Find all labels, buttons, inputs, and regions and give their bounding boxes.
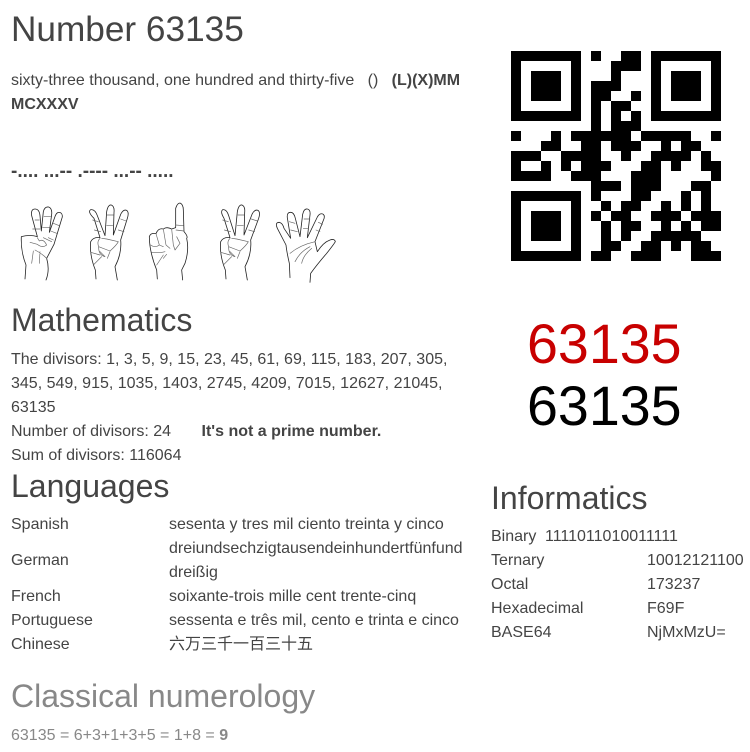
languages table: soixante-trois mille cent trente-cinq: [169, 588, 416, 605]
languages table: Spanish: [11, 516, 69, 533]
informatics table: Octal: [491, 576, 528, 593]
informatics table: NjMxMzU=: [647, 624, 726, 641]
languages table: German: [11, 552, 69, 569]
number in words and roman numeral: MCXXXV: [11, 96, 79, 113]
informatics table: Binary: [491, 528, 536, 545]
heading: classical numerology: Classical numerology: [11, 678, 315, 714]
languages table: 六万三千一百三十五: [169, 636, 313, 653]
QR code: [511, 51, 721, 261]
divisors list and counts: Sum of divisors: 116064: [11, 447, 181, 464]
icon: hand 1: [149, 203, 188, 280]
languages table: French: [11, 588, 61, 605]
informatics table: BASE64: [491, 624, 551, 641]
languages table: sesenta y tres mil ciento treinta y cinco: [169, 516, 444, 533]
icon: hand 5: [276, 209, 335, 282]
large black number: 63135: [527, 375, 682, 437]
heading: languages: Languages: [11, 468, 169, 504]
informatics table: 173237: [647, 576, 700, 593]
heading: mathematics: Mathematics: [11, 302, 192, 338]
divisors list and counts: 345, 549, 915, 1035, 1403, 2745, 4209, 7015, 12627, 21045,: [11, 375, 442, 392]
divisors list and counts: [11, 351, 447, 464]
divisors list and counts: The divisors: 1, 3, 5, 9, 15, 23, 45, 61, 69, 115, 183, 207, 305,: [11, 351, 447, 368]
icon: hand 3: [220, 205, 260, 280]
morse code: -.... ...-- .---- ...-- .....: [11, 161, 174, 182]
informatics table: Hexadecimal: [491, 600, 583, 617]
languages table: sessenta e três mil, cento e trinta e cinco: [169, 612, 459, 629]
numerology calculation: 63135 = 6+3+1+3+5 = 1+8 = 9: [11, 727, 228, 744]
informatics table: [491, 528, 744, 641]
sign language hands: [20, 202, 336, 283]
languages table: Portuguese: [11, 612, 93, 629]
informatics table: 10012121100: [647, 552, 744, 569]
languages table: dreiundsechzigtausendeinhundertfünfund: [169, 540, 463, 557]
icon: hand 3: [90, 205, 128, 280]
heading: informatics: Informatics: [491, 480, 647, 516]
divisors list and counts: 63135: [11, 399, 56, 416]
languages table: Chinese: [11, 636, 70, 653]
languages table: [11, 516, 463, 653]
divisors list and counts: Number of divisors: 24 It's not a prime number.: [11, 423, 381, 440]
informatics table: 1111011010011111: [545, 528, 678, 545]
number in words and roman numeral: sixty-three thousand, one hundred and thirty-five () (L)(X)MM: [11, 72, 460, 89]
informatics table: F69F: [647, 600, 684, 617]
languages table: dreißig: [169, 564, 218, 581]
large red number: 63135: [527, 313, 682, 375]
number in words and roman numeral: [11, 72, 460, 113]
icon: hand 6: [21, 207, 62, 280]
title: Number 63135: [11, 10, 244, 49]
informatics table: Ternary: [491, 552, 544, 569]
